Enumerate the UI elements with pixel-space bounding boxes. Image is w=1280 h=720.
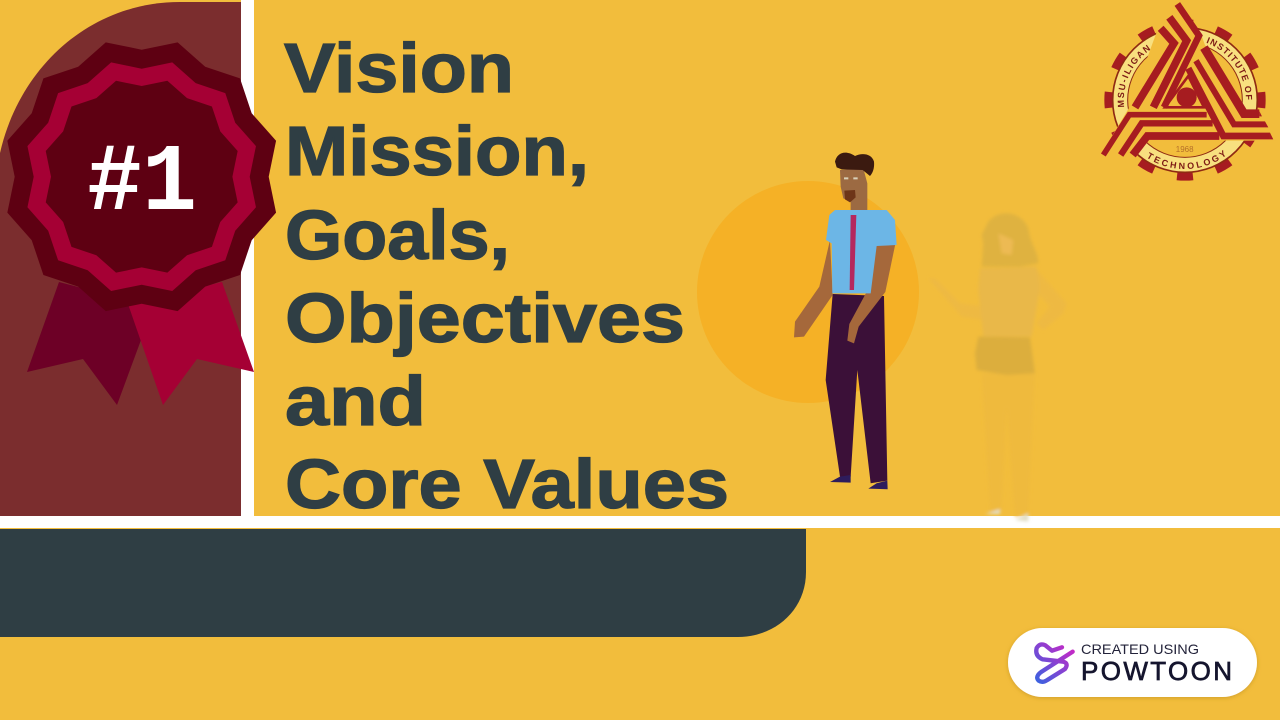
title: Mission, [285, 112, 589, 190]
title: Goals, [285, 196, 510, 274]
seal outer [7, 42, 276, 311]
title: and [285, 362, 426, 440]
woman shorts [975, 337, 1035, 375]
woman hair [982, 213, 1038, 267]
logo triangle backing [1100, 0, 1276, 156]
woman arms [928, 270, 1067, 330]
powtoon icon [1036, 644, 1073, 682]
logo ring text: MSU-ILIGAN [1118, 44, 1150, 107]
title: Vision [284, 29, 514, 107]
logo ring center [1128, 43, 1242, 157]
woman legs [982, 373, 1035, 517]
faded woman figure [928, 213, 1067, 522]
powtoon badge [1008, 628, 1257, 697]
school logo [1101, 2, 1274, 181]
logo ring band [1113, 28, 1257, 172]
white horizontal divider [0, 516, 1280, 528]
left ribbon [27, 282, 141, 405]
seal inner [46, 81, 238, 273]
logo ring text [1118, 37, 1252, 169]
title: Objectives [285, 279, 685, 357]
logo ring text: TECHNOLOGY [1148, 150, 1225, 169]
logo stripes [1103, 4, 1270, 155]
woman face [998, 233, 1013, 255]
logo sphere [1177, 87, 1197, 107]
woman feet [985, 509, 1028, 522]
created using label: CREATED USING [1081, 641, 1199, 657]
badge number: #1 [87, 129, 197, 238]
man hair [835, 153, 874, 176]
award badge [7, 42, 276, 405]
man shoes [830, 475, 888, 489]
logo stripe tips [1259, 111, 1273, 139]
white vertical divider [241, 0, 254, 516]
title: Core Values [285, 445, 729, 523]
logo ring text: INSTITUTE OF [1206, 37, 1252, 100]
man beard [844, 190, 856, 202]
title [284, 29, 729, 523]
orange circle behind figure [697, 181, 919, 403]
man neck and face [840, 168, 867, 212]
panel: maroon rounded panel [0, 2, 241, 516]
man arms [794, 240, 895, 343]
woman top [978, 267, 1040, 337]
right ribbon [128, 282, 254, 405]
man pants [826, 294, 887, 483]
logo year: 1968 [1176, 145, 1194, 154]
badge pill [1008, 628, 1257, 697]
powtoon wordmark: POWTOON [1081, 656, 1232, 686]
man shirt [826, 210, 897, 293]
logo cog teeth [1108, 23, 1262, 177]
man tie [850, 215, 856, 290]
man figure [794, 153, 897, 489]
panel: dark bottom bar [0, 529, 806, 637]
seal middle ring [27, 62, 256, 291]
man eyes [844, 177, 858, 179]
